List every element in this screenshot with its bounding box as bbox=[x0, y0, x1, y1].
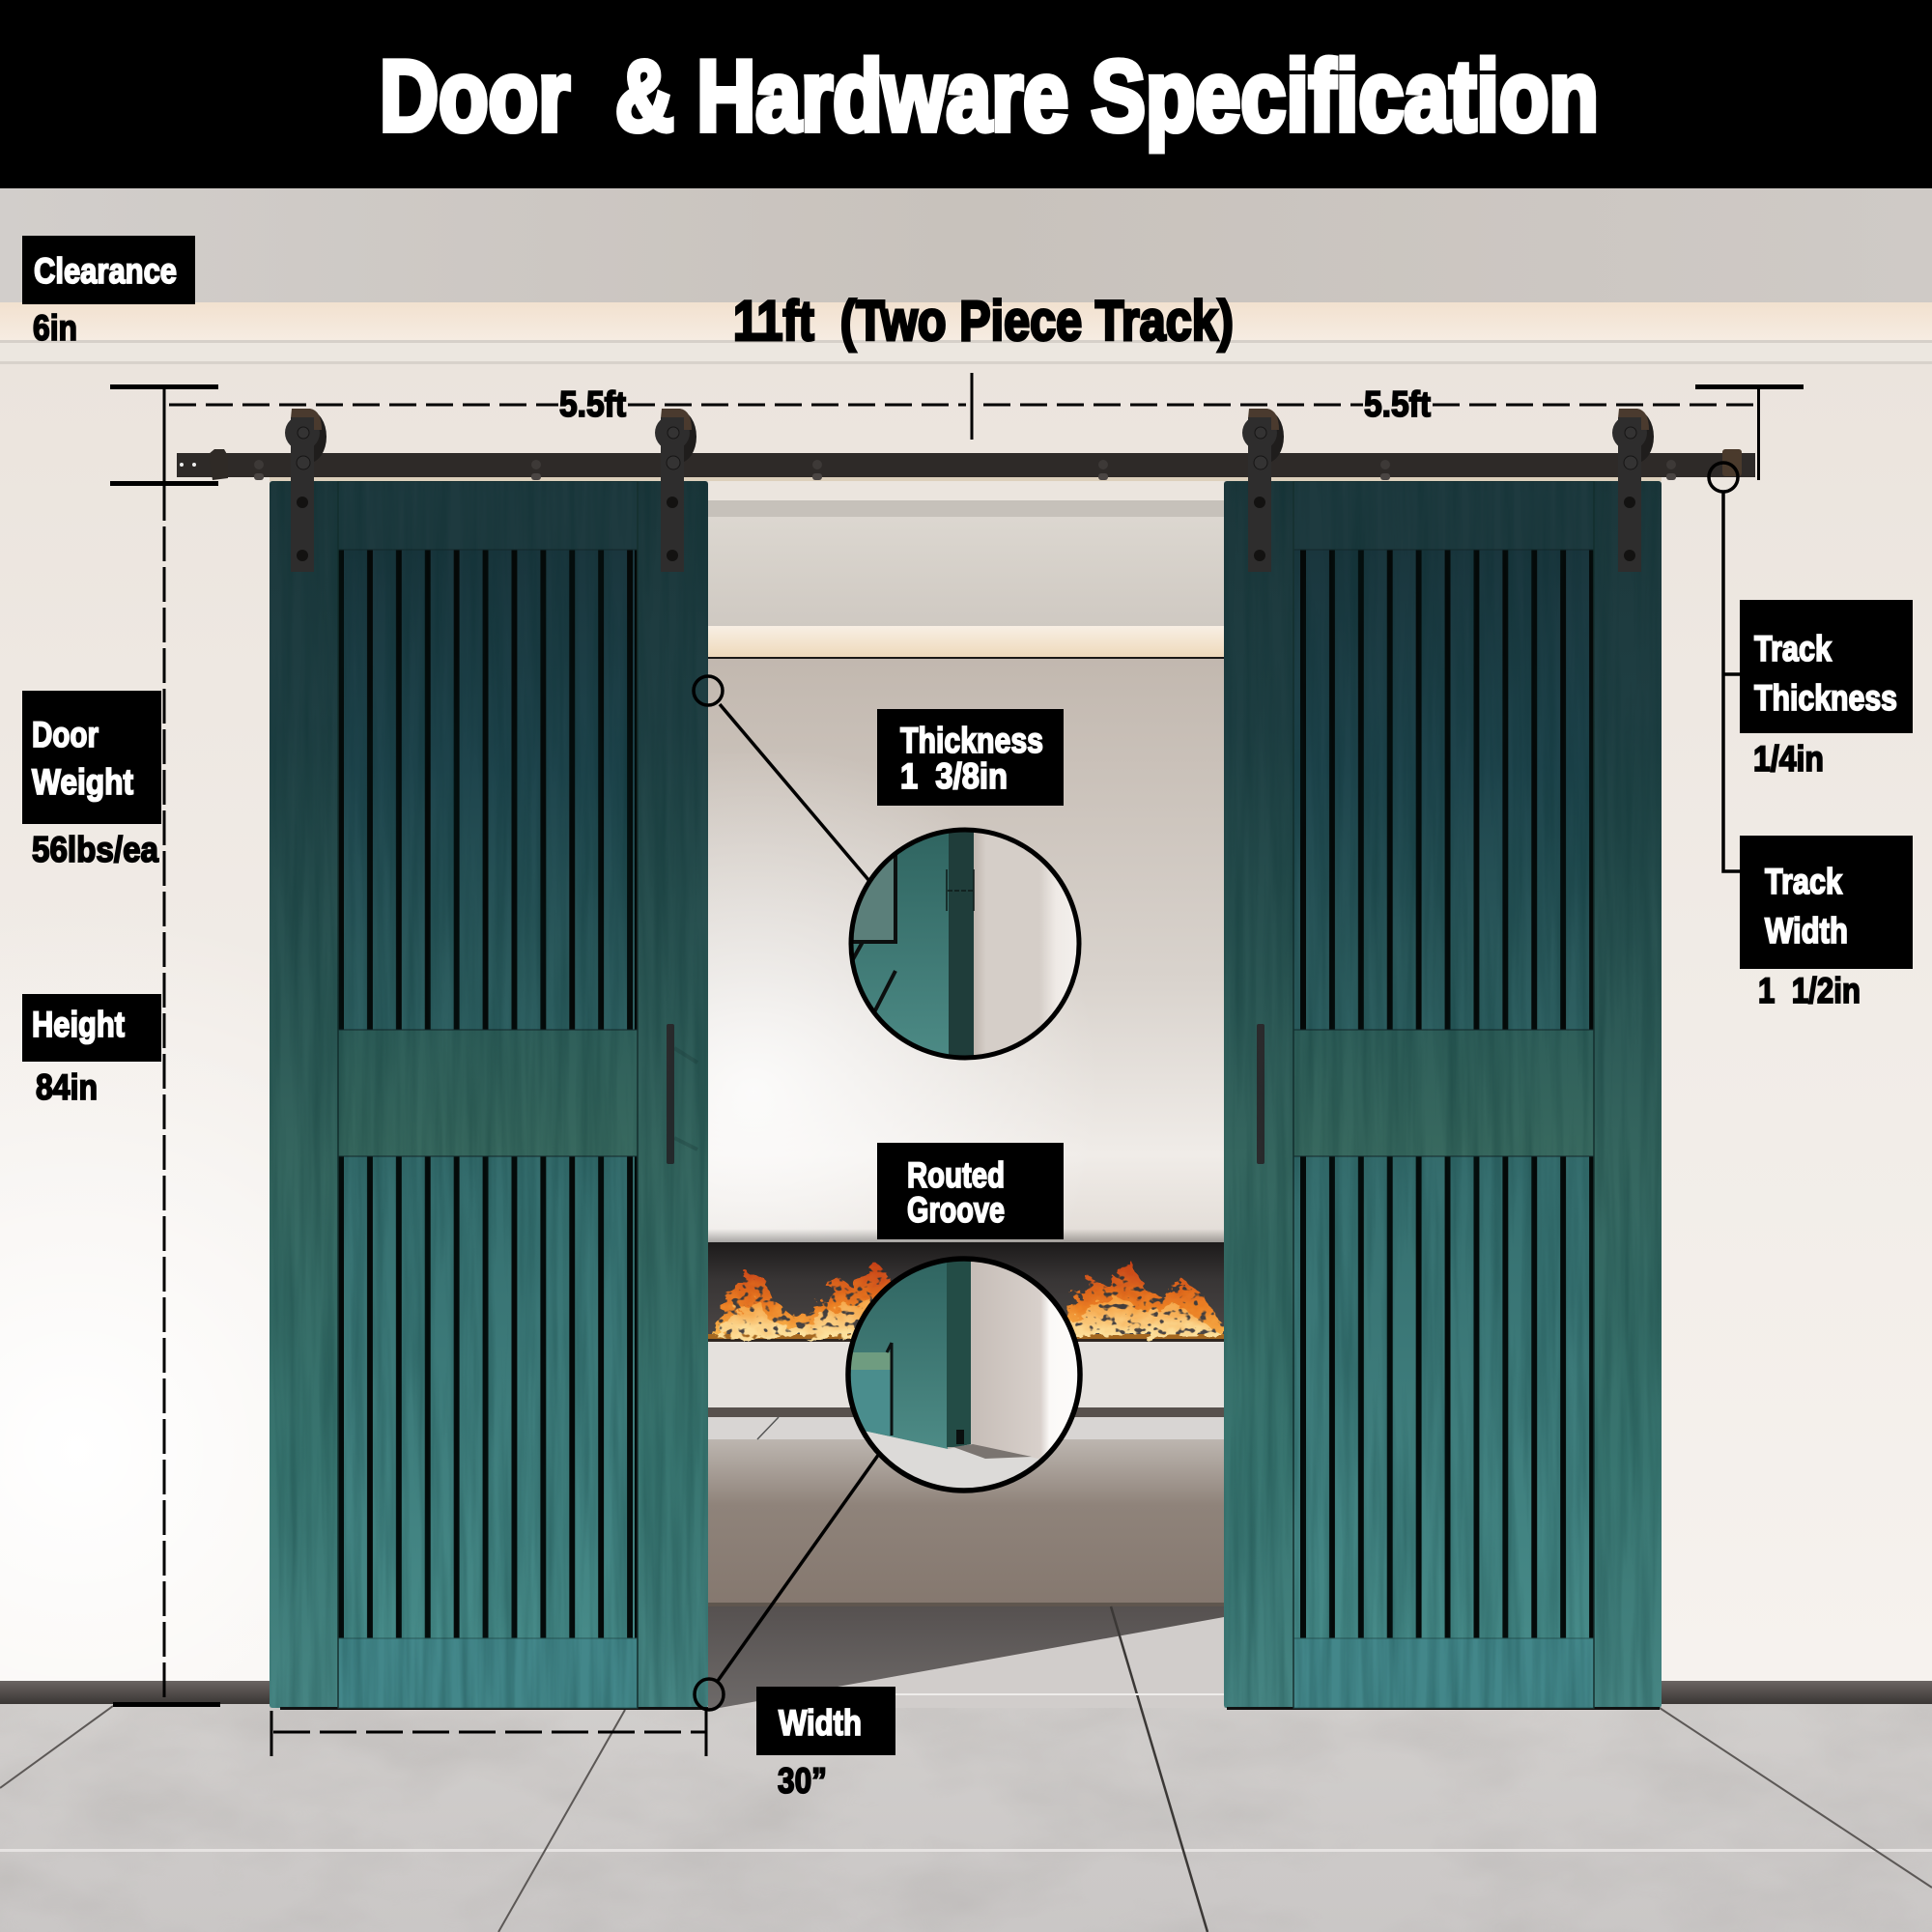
wood grain overlay bbox=[270, 481, 1662, 1708]
sliding track bbox=[177, 449, 1755, 481]
fireplace flames left bbox=[713, 1262, 894, 1337]
upper slat panel bbox=[1293, 550, 1594, 1030]
lower slat panel bbox=[1293, 1156, 1594, 1638]
label: door weight: Weight bbox=[32, 762, 133, 802]
label: height: 84in bbox=[36, 1067, 98, 1107]
label: track width bbox=[1740, 836, 1913, 1010]
middle rail bbox=[1293, 1030, 1594, 1156]
label: track thickness: Thickness bbox=[1754, 678, 1897, 718]
label: clearance: Clearance bbox=[34, 251, 177, 291]
clearance bracket right bbox=[1695, 384, 1804, 480]
lower slat panel bbox=[338, 1156, 638, 1638]
label: height: Height bbox=[32, 1005, 125, 1044]
magnifier: routed groove detail bbox=[840, 1256, 1087, 1507]
bottom rail bbox=[338, 1638, 638, 1708]
width dimension line bbox=[270, 1711, 707, 1756]
right end stop bbox=[1722, 449, 1742, 476]
label: width: 30” bbox=[778, 1761, 827, 1801]
door handle bbox=[1257, 1024, 1264, 1164]
title text: Door & Hardware Specification bbox=[380, 41, 1599, 153]
floor shadow beside door bbox=[708, 1606, 1224, 1710]
label: track thickness: 1/4in bbox=[1753, 739, 1824, 779]
upper slat panel bbox=[338, 550, 638, 1030]
fireplace flames right bbox=[1063, 1260, 1225, 1337]
left sliding door bbox=[270, 481, 708, 1710]
label: clearance: 6in bbox=[33, 308, 77, 348]
hanger 2 bbox=[655, 409, 696, 572]
label: clearance bbox=[22, 236, 195, 348]
tile joints on floor bbox=[1111, 1606, 1208, 1932]
middle rail bbox=[338, 1030, 638, 1156]
label: routed groove bbox=[877, 1143, 1064, 1239]
dimension: centre tick bbox=[970, 373, 974, 440]
left end stop bbox=[209, 449, 228, 480]
label: routed groove: Groove bbox=[907, 1190, 1005, 1230]
dimension: 11ft overall track: 11ft (Two Piece Track) bbox=[733, 290, 1234, 353]
top rail bbox=[338, 481, 638, 550]
label: height bbox=[22, 994, 161, 1107]
top rail bbox=[1293, 481, 1594, 550]
label: track width: Track bbox=[1765, 862, 1842, 901]
label: width bbox=[756, 1687, 895, 1801]
floor area in doorway bbox=[708, 1606, 1224, 1708]
label: door weight: 56lbs/ea bbox=[32, 830, 158, 869]
label: door thickness: 1 3/8in bbox=[900, 756, 1008, 796]
bottom rail bbox=[1293, 1638, 1594, 1708]
background: view through the opening bbox=[708, 481, 1224, 1932]
under-door shadow bbox=[280, 1707, 708, 1710]
label: door weight bbox=[22, 691, 161, 869]
label: track thickness bbox=[1740, 600, 1913, 779]
height dimension line bbox=[113, 486, 220, 1707]
dimension: right 5.5ft: 5.5ft bbox=[1364, 384, 1431, 424]
leader: track callout bbox=[1709, 463, 1740, 871]
title banner bbox=[0, 0, 1932, 188]
label: door thickness: Thickness bbox=[900, 721, 1043, 760]
hanger 4 bbox=[1612, 409, 1654, 572]
track bolts bbox=[254, 460, 1676, 480]
leader: thickness callout bbox=[694, 676, 869, 881]
leader: routed groove callout bbox=[695, 1454, 879, 1710]
label: track width: 1 1/2in bbox=[1758, 971, 1861, 1010]
under-door shadow bbox=[1227, 1707, 1660, 1710]
label: track thickness: Track bbox=[1754, 629, 1832, 668]
dimension: left 5.5ft: 5.5ft bbox=[559, 384, 626, 424]
hanger 3 bbox=[1242, 409, 1284, 572]
label: door thickness bbox=[877, 709, 1064, 806]
label: door weight: Door bbox=[32, 715, 99, 754]
label: routed groove: Routed bbox=[907, 1155, 1005, 1195]
label: track width: Width bbox=[1765, 911, 1848, 951]
magnifier: door thickness detail bbox=[845, 826, 1084, 1063]
hanger 1 bbox=[285, 409, 327, 572]
door handle bbox=[667, 1024, 697, 1164]
label: width: Width bbox=[779, 1703, 862, 1743]
right sliding door bbox=[1224, 481, 1662, 1710]
clearance bracket left bbox=[110, 384, 218, 486]
